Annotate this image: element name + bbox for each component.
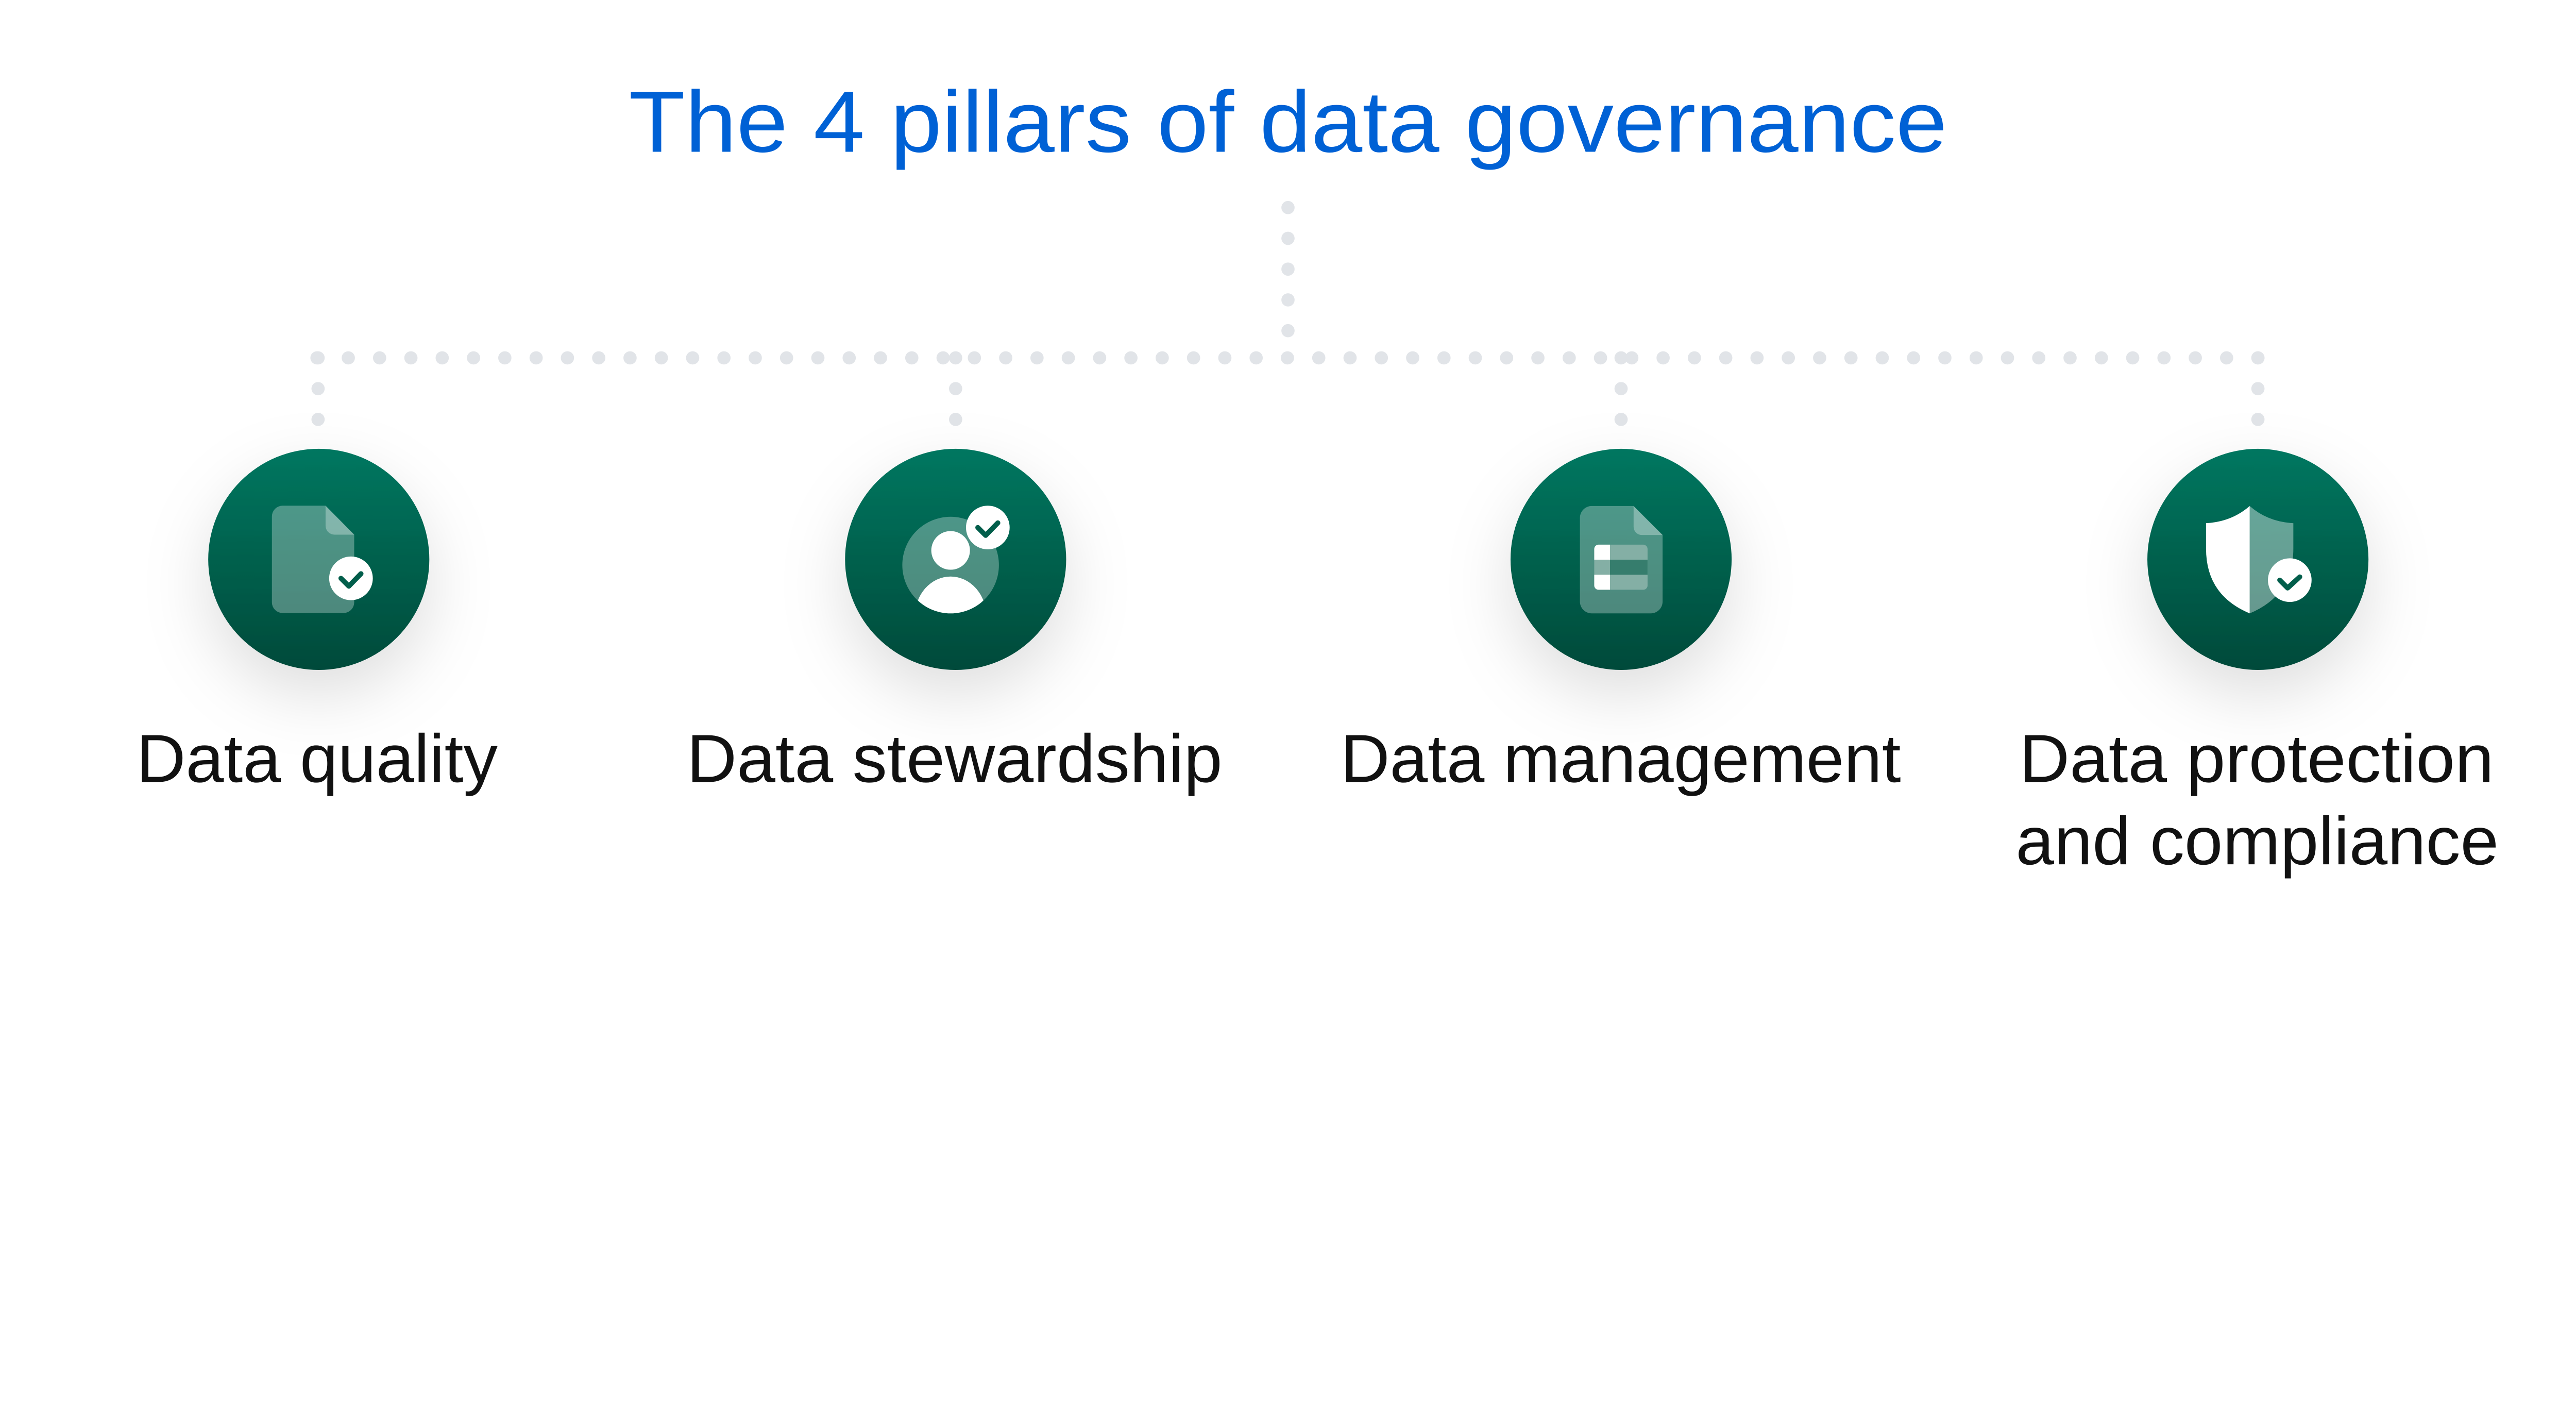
- label: data protection and compliance: and compliance: [2015, 803, 2499, 879]
- label: data protection and compliance: Data protection: [2019, 720, 2494, 796]
- label: data protection and compliance: [2015, 720, 2499, 879]
- label: data quality: Data quality: [137, 720, 498, 796]
- pillar: data management: [1511, 449, 1732, 670]
- label: data management: Data management: [1341, 720, 1901, 796]
- icon: shield with check: [2206, 506, 2312, 613]
- pillar: data quality: [208, 449, 429, 670]
- icon: person with check: [902, 506, 1010, 613]
- title: The 4 pillars of data governance: [629, 73, 1947, 170]
- pillar: data stewardship: [845, 449, 1066, 670]
- label: data stewardship: Data stewardship: [687, 720, 1223, 796]
- connector dots: [317, 208, 2259, 447]
- icon: document with check: [272, 506, 373, 613]
- pillar: data protection: [2147, 449, 2368, 670]
- icon: spreadsheet document: [1580, 506, 1663, 613]
